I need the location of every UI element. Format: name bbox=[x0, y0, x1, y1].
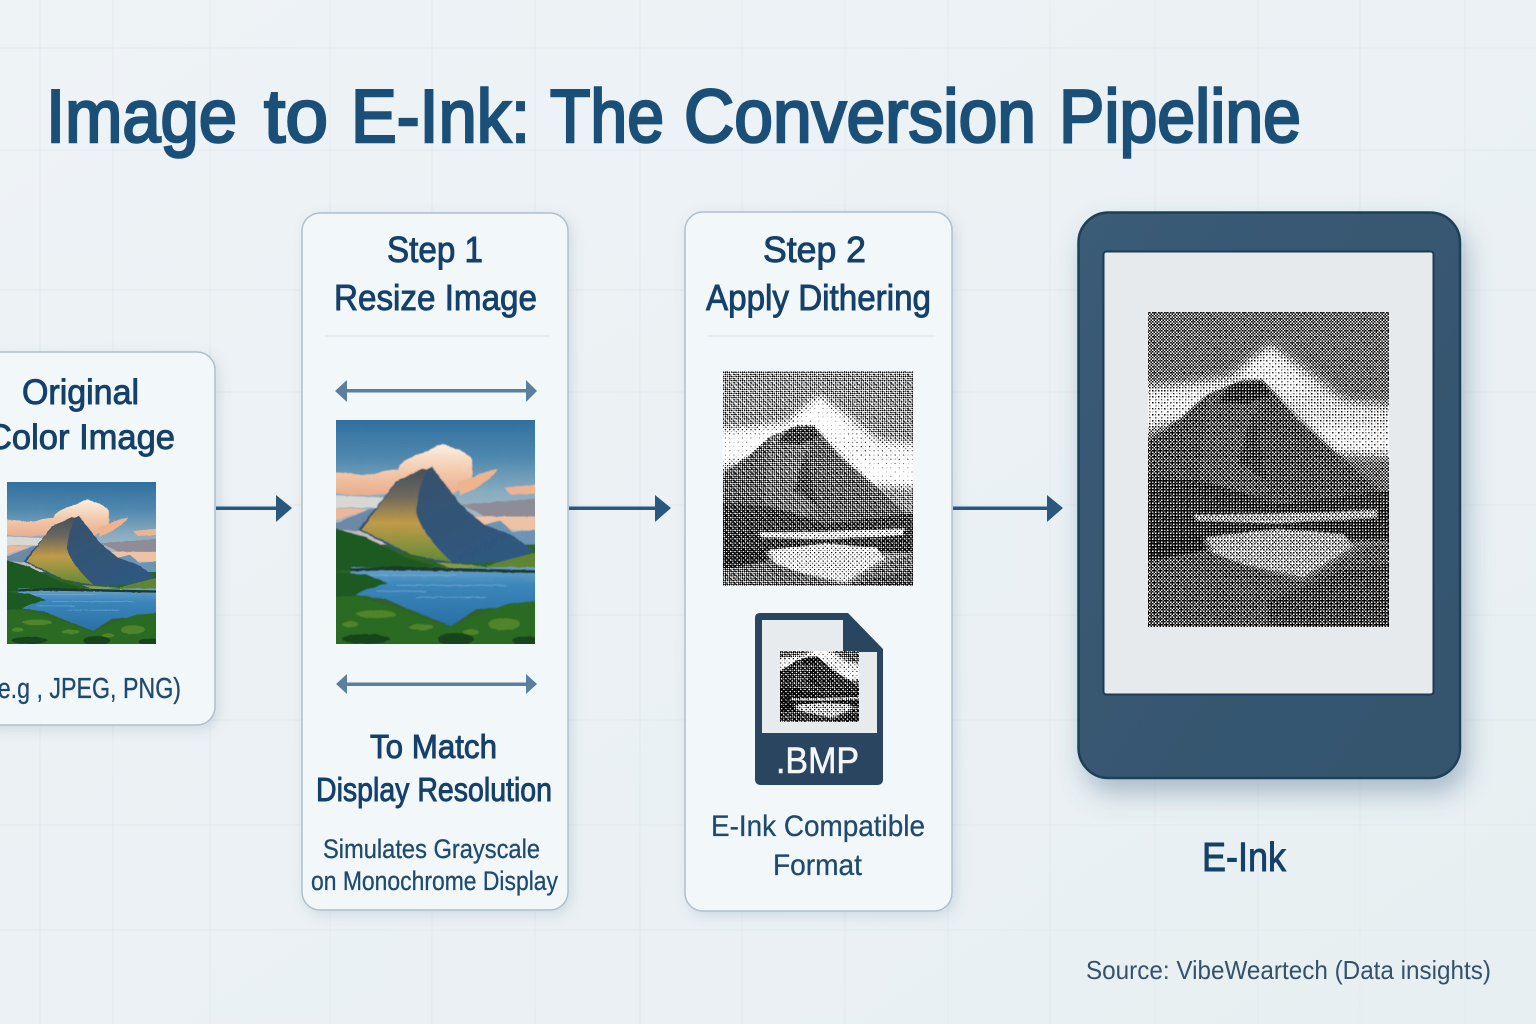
heading: step 2 bbox=[706, 229, 931, 318]
device body bbox=[1078, 212, 1460, 778]
heading: step 1 bbox=[334, 229, 537, 318]
heading: step 2: Apply Dithering bbox=[706, 277, 931, 318]
image: dithered landscape bbox=[711, 371, 925, 626]
heading: original color image bbox=[0, 373, 175, 457]
caption: e-ink compatible format bbox=[711, 810, 925, 882]
caption: match display resolution: To Match bbox=[370, 728, 497, 765]
caption: match display resolution: Display Resolution bbox=[316, 771, 552, 808]
arrow: step 2 to device bbox=[953, 495, 1063, 522]
caption: match display resolution bbox=[316, 728, 552, 808]
icon: BMP file: .BMP bbox=[776, 740, 859, 781]
image: dithered landscape on screen bbox=[1133, 312, 1404, 632]
title: Conversion bbox=[684, 74, 1036, 158]
note: simulates grayscale: Simulates Grayscale bbox=[323, 834, 540, 864]
icon: bottom width arrow bbox=[336, 674, 537, 694]
panel: step 1 resize image bbox=[302, 213, 568, 910]
icon: BMP file bbox=[755, 613, 883, 785]
card background bbox=[302, 213, 568, 910]
arrow: original to step 1 bbox=[216, 495, 292, 522]
title: to bbox=[264, 74, 328, 158]
title: Pipeline bbox=[1059, 74, 1301, 158]
device screen bbox=[1104, 252, 1434, 694]
heading: original color image: Original bbox=[22, 373, 139, 412]
title: The bbox=[550, 74, 664, 158]
card background bbox=[685, 212, 952, 911]
icon: top width arrow bbox=[335, 380, 537, 402]
caption: e-ink compatible format: Format bbox=[773, 849, 863, 882]
image: color landscape thumbnail bbox=[0, 473, 165, 653]
e-ink device bbox=[1078, 212, 1460, 778]
panel: original color image bbox=[0, 352, 215, 725]
title: E-Ink: bbox=[351, 74, 530, 158]
arrow: step 1 to step 2 bbox=[569, 495, 671, 522]
heading: step 1: Resize Image bbox=[334, 277, 537, 318]
note: simulates grayscale bbox=[311, 834, 558, 896]
device label: E-Ink bbox=[1202, 834, 1286, 880]
heading: step 1: Step 1 bbox=[387, 229, 483, 270]
note: simulates grayscale: on Monochrome Display bbox=[311, 866, 558, 896]
title bbox=[46, 74, 1301, 158]
heading: step 2: Step 2 bbox=[763, 229, 866, 270]
source credit: Source: VibeWeartech (Data insights) bbox=[1086, 955, 1491, 985]
card background bbox=[0, 352, 215, 725]
caption: e-ink compatible format: E-Ink Compatible bbox=[711, 810, 925, 843]
image: resized color landscape bbox=[324, 408, 547, 656]
title: Image bbox=[46, 74, 237, 158]
panel: step 2 apply dithering bbox=[685, 212, 952, 911]
